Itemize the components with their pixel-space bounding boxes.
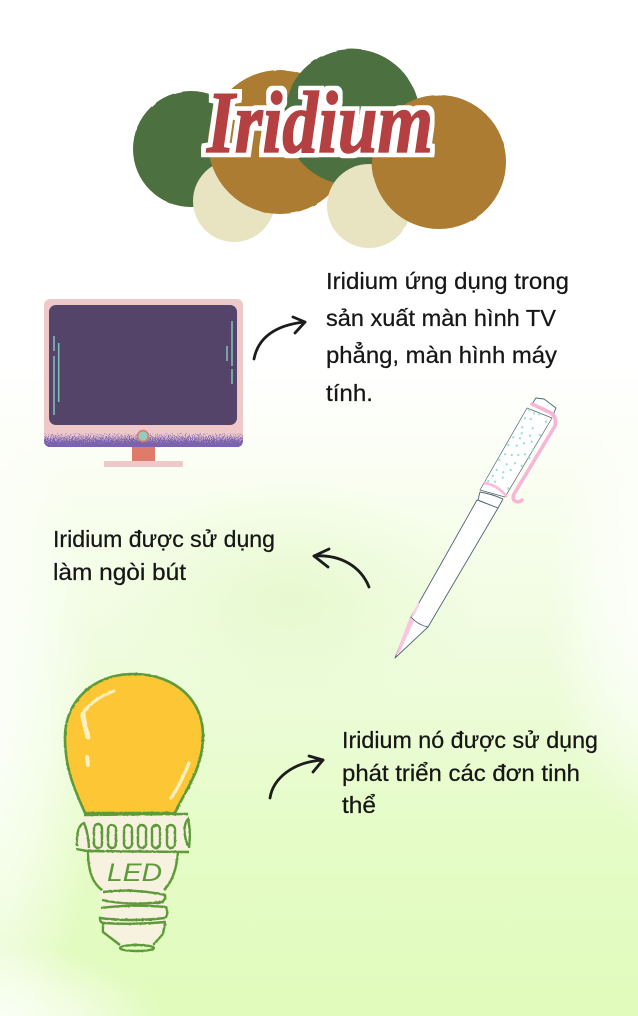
icon: computer monitor (44, 299, 243, 467)
text: single crystals: Iridium nó được sử dụng (342, 727, 598, 753)
text: pen nib: Iridium được sử dụng (53, 526, 275, 552)
text: screens: Iridium ứng dụng trong (326, 268, 569, 294)
pen dots (487, 409, 547, 489)
text: screens: phẳng, màn hình máy (326, 340, 558, 368)
title cluster (133, 49, 506, 248)
bulb label: LED (107, 859, 162, 887)
icon: pen (395, 398, 556, 658)
text: screens (326, 268, 569, 406)
text: single crystals: phát triển các đơn tinh (342, 760, 580, 786)
text: pen nib (53, 526, 275, 585)
arrow: pen to text (314, 549, 369, 587)
text: screens: tính. (326, 380, 373, 406)
text: pen nib: làm ngòi bút (53, 559, 187, 585)
painted circles (133, 49, 506, 248)
text: single crystals (342, 727, 598, 818)
text: screens: sản xuất màn hình TV (326, 305, 557, 331)
arrow: bulb to text (270, 756, 323, 798)
title: Iridium (206, 75, 433, 172)
icon: LED bulb (65, 674, 203, 951)
pen clip (513, 404, 556, 502)
arrow: monitor to text (254, 317, 305, 359)
text: single crystals: thể (342, 792, 376, 818)
